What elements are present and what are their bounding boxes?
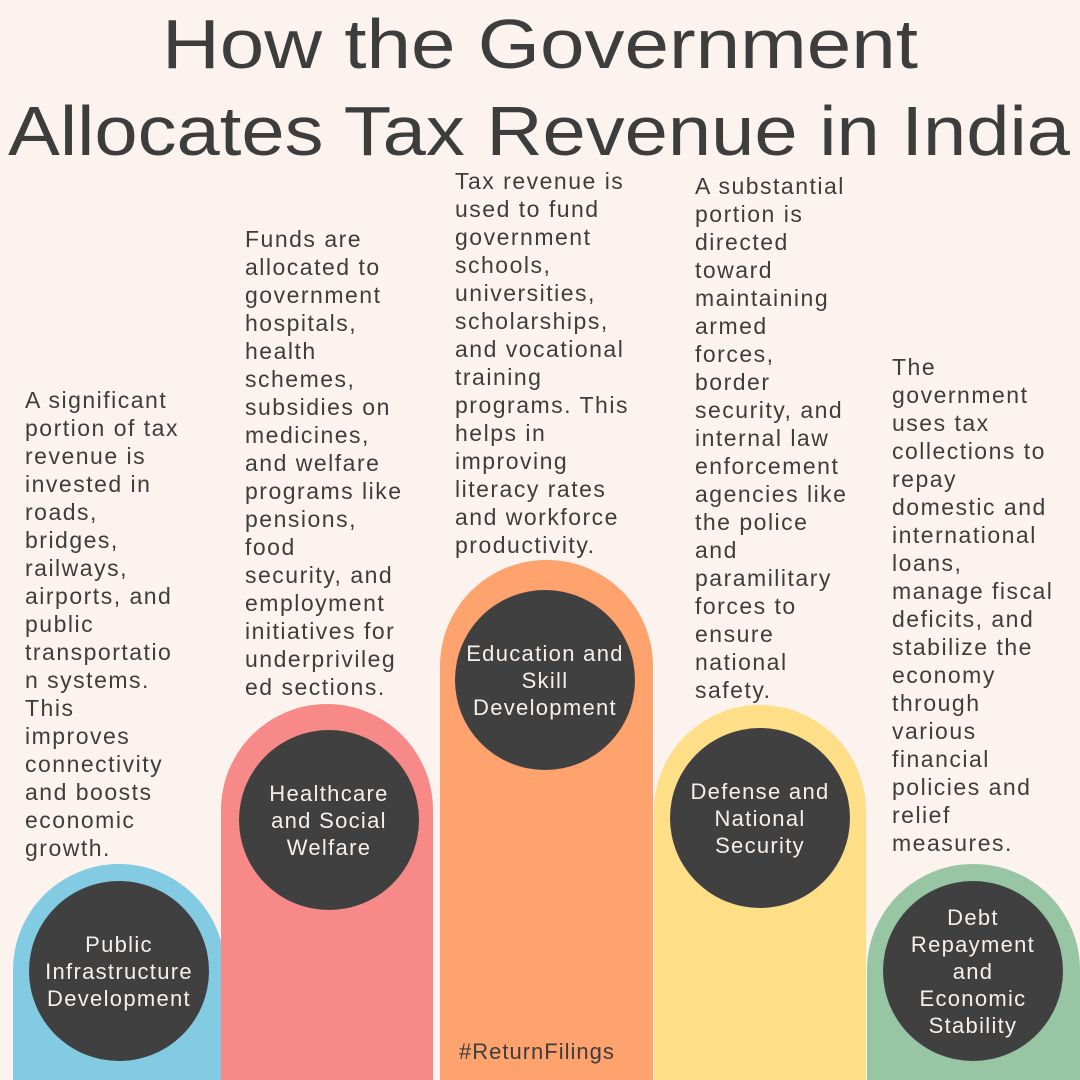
text: healthcare: allocated to [245,254,381,280]
pillar: education [440,560,653,1080]
text: defense: the police [695,509,808,535]
text: debt: economy [892,662,996,688]
text: defense: directed [695,229,789,255]
text: education: used to fund [455,196,600,222]
text: debt: The [892,354,936,380]
circle: healthcare: Healthcare [269,780,389,806]
circle: healthcare: and Social [271,808,387,832]
text: debt: repay [892,466,957,492]
text: debt: financial [892,746,990,772]
text: infrastructure: improves [25,723,130,749]
text: infrastructure: bridges, [25,527,119,553]
text: debt: deficits, and [892,606,1034,632]
text: infrastructure: airports, and [25,583,172,609]
text: healthcare: food [245,534,296,560]
text: healthcare: security, and [245,562,393,588]
circle: infrastructure: Public [85,932,153,956]
text: education: and vocational [455,336,624,362]
circle: infrastructure: Development [47,986,191,1010]
text: defense: forces, [695,341,775,367]
circle: defense: Security [715,832,805,858]
circle: education: Skill [522,668,568,692]
circle: education: Education and [466,640,624,666]
text: defense: safety. [695,677,772,703]
text: education: scholarships, [455,308,609,334]
circle: debt: Debt [947,904,999,930]
circle: defense: National [714,806,806,830]
text: education: improving [455,448,568,474]
text: debt: loans, [892,550,962,576]
text: infrastructure: revenue is [25,443,146,469]
text: infrastructure: n systems. [25,667,150,693]
text: infrastructure: connectivity [25,751,163,777]
text: debt: through [892,690,981,716]
text: healthcare: government [245,282,381,308]
hashtag: #ReturnFilings [459,1039,615,1064]
text: healthcare: and welfare [245,450,380,476]
text: infrastructure [25,387,179,861]
text: healthcare: schemes, [245,366,355,392]
text: defense: and [695,537,738,563]
text: debt: uses tax [892,410,990,436]
text: education: programs. This [455,392,629,418]
text: debt: manage fiscal [892,578,1053,604]
text: healthcare: underprivileg [245,646,396,672]
pillar: defense [654,705,866,1080]
circle: debt: Economic [919,986,1026,1010]
text: education: government [455,224,591,250]
text: defense: maintaining [695,285,829,311]
text: infrastructure: railways, [25,555,128,581]
circle: debt: and [953,958,993,984]
text: debt: stabilize the [892,634,1033,660]
title: How the Government [162,5,918,83]
text: healthcare: initiatives for [245,618,395,644]
circle: infrastructure [29,881,209,1061]
title [8,5,1070,170]
text: debt: international [892,522,1037,548]
text: defense [695,173,847,703]
text: healthcare: health [245,338,317,364]
text: debt: domestic and [892,494,1047,520]
circle: debt: Stability [929,1012,1017,1038]
pillar: infrastructure [13,864,225,1080]
circle: infrastructure: Infrastructure [45,958,193,984]
text: defense: internal law [695,425,829,451]
text: healthcare: hospitals, [245,310,357,336]
text: education: training [455,364,542,390]
text: healthcare: medicines, [245,422,370,448]
text: education [455,168,629,558]
text: defense: border [695,369,770,395]
text: education: schools, [455,252,551,278]
text: education: Tax revenue is [455,168,624,194]
text: defense: ensure [695,621,774,647]
title: Allocates Tax Revenue in India [8,92,1070,170]
text: infrastructure: This [25,695,74,721]
text: defense: national [695,649,788,675]
text: education: universities, [455,280,596,306]
text: infrastructure: portion of tax [25,415,179,441]
text: healthcare: pensions, [245,506,357,532]
circle: defense: Defense and [690,778,830,804]
circle: healthcare: Welfare [287,834,371,860]
circle: debt: Repayment [911,932,1035,956]
text: defense: armed [695,313,768,339]
text: education: literacy rates [455,476,606,502]
text: education: productivity. [455,532,596,558]
text: debt: policies and [892,774,1031,800]
circle: defense [670,728,850,908]
text: healthcare: programs like [245,478,403,504]
text: defense: A substantial [695,173,845,199]
circle: education: Development [473,694,617,720]
text: defense: forces to [695,593,797,619]
text: infrastructure: A significant [25,387,167,413]
text: defense: portion is [695,201,803,227]
text: healthcare: employment [245,590,385,616]
text: infrastructure: transportatio [25,639,172,665]
text: defense: enforcement [695,453,839,479]
circle: education [455,590,635,770]
text: healthcare [245,226,403,700]
text: debt: various [892,718,977,744]
text: healthcare: subsidies on [245,394,391,420]
text: healthcare: ed sections. [245,674,386,700]
text: defense: paramilitary [695,565,832,591]
text: debt: government [892,382,1028,408]
text: infrastructure: roads, [25,499,98,525]
text: defense: toward [695,257,773,283]
text: infrastructure: economic [25,807,135,833]
text: defense: security, and [695,397,843,423]
text: healthcare: Funds are [245,226,362,252]
text: debt: collections to [892,438,1046,464]
text: infrastructure: growth. [25,835,111,861]
text: debt: measures. [892,830,1013,856]
text: education: and workforce [455,504,619,530]
text: infrastructure: public [25,611,94,637]
text: infrastructure: and boosts [25,779,153,805]
pillar: healthcare [221,704,433,1080]
circle: debt [883,881,1063,1061]
text: defense: agencies like [695,481,847,507]
circle: healthcare [239,730,419,910]
text: infrastructure: invested in [25,471,151,497]
text: education: helps in [455,420,546,446]
pillar: debt [867,864,1080,1080]
text: debt [892,354,1053,856]
text: debt: relief [892,802,951,828]
